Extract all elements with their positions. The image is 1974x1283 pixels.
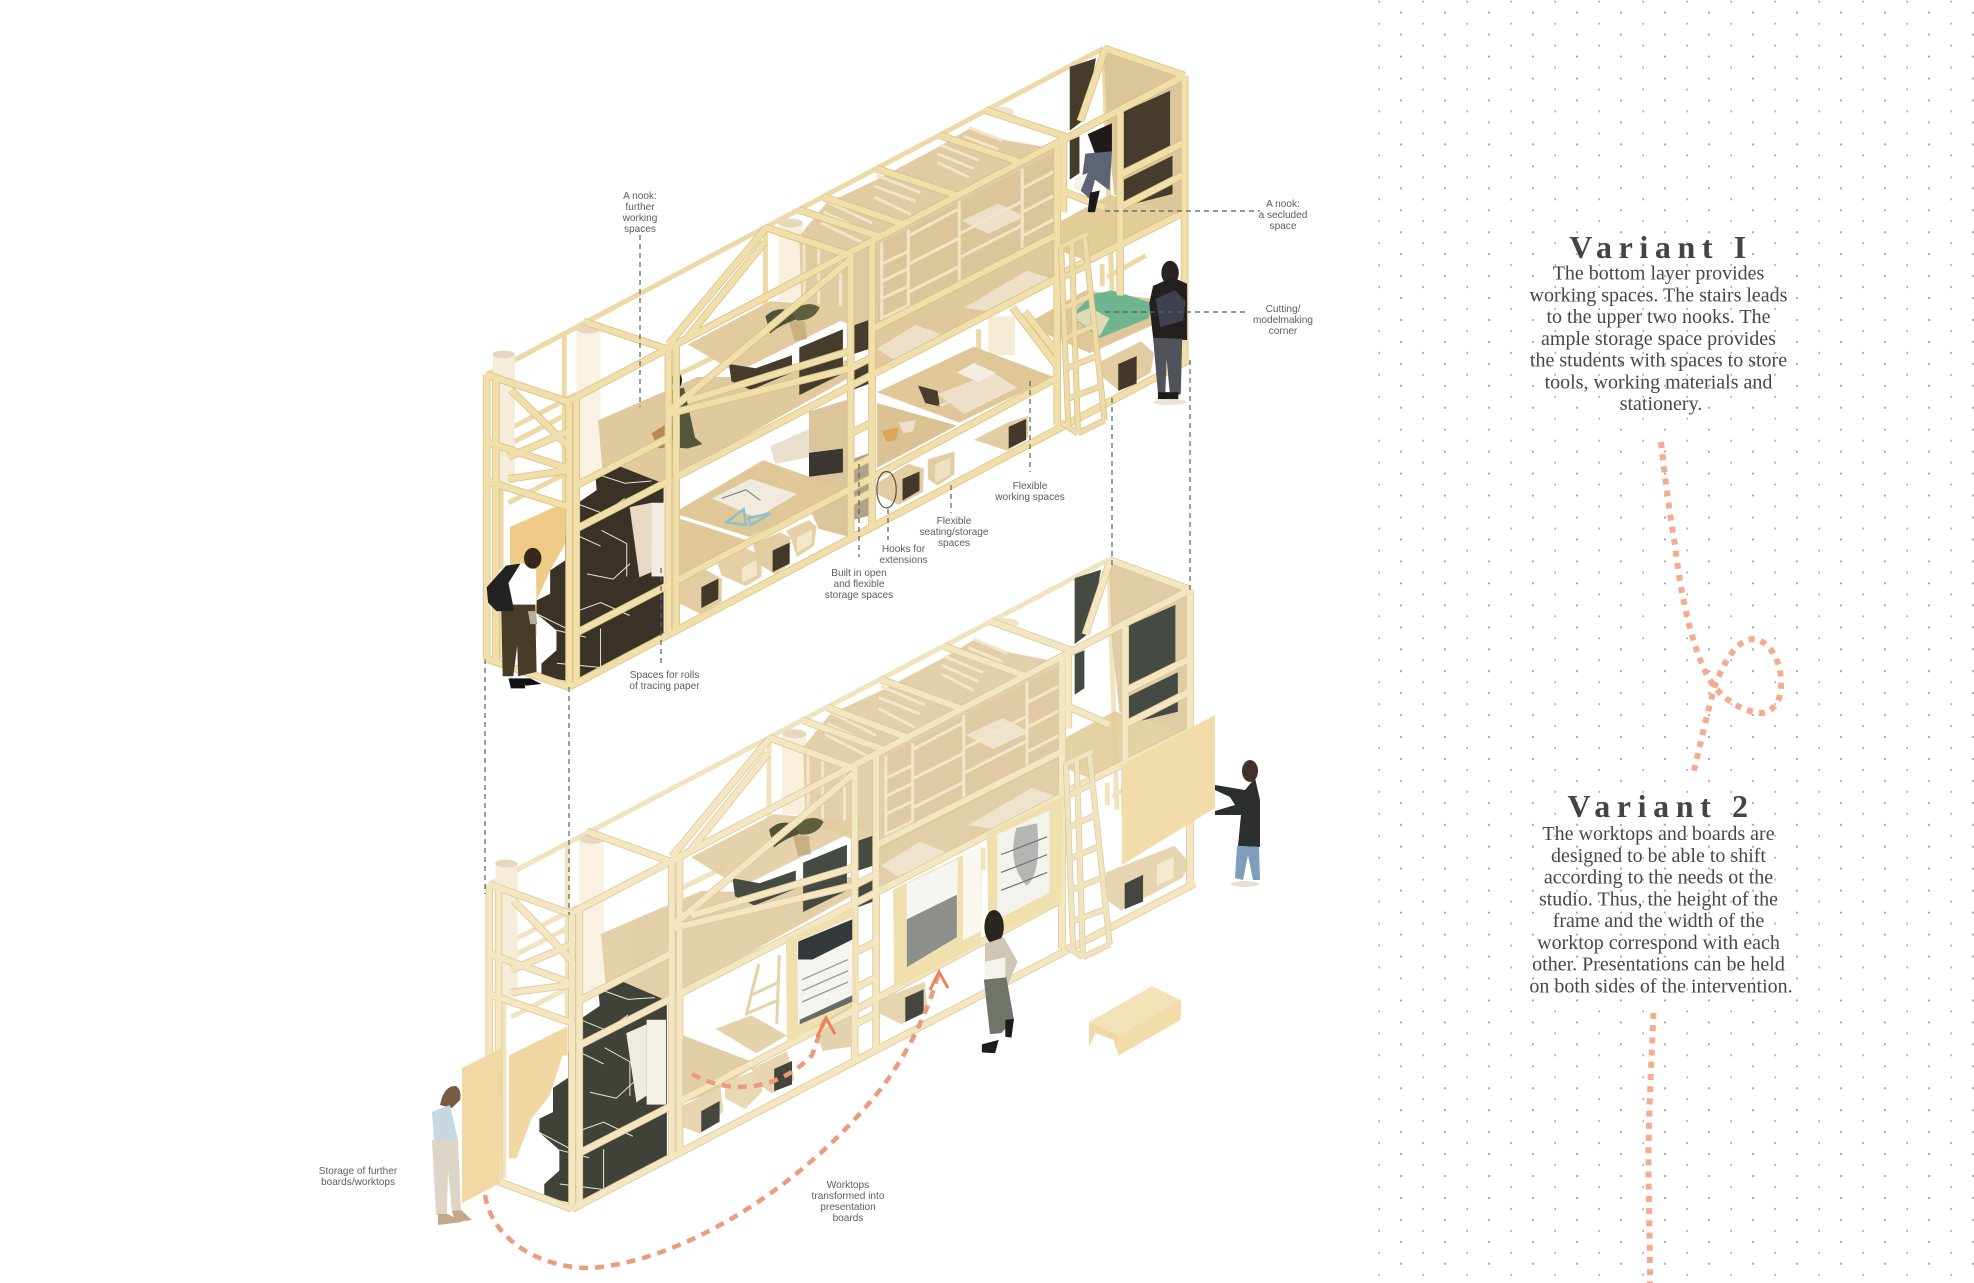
front frame [489, 547, 1195, 1222]
ladder [1061, 234, 1105, 433]
label: flexible working spaces: Flexible [1013, 481, 1048, 492]
label: flexible seating: seating/storage [919, 527, 989, 538]
isometric drawing: variant 2 module [489, 547, 1195, 1222]
back frame [487, 48, 1146, 659]
worktop movement path [485, 972, 948, 1268]
paper rolls [495, 607, 1019, 1008]
bench [1089, 986, 1181, 1056]
label: worktops transformed: transformed into [812, 1191, 885, 1202]
isometric drawing: variant 1 module [487, 48, 1189, 688]
person with backpack [487, 548, 541, 688]
label: nook working spaces: further [625, 202, 655, 213]
label: secluded nook: A nook: [1266, 199, 1300, 210]
text block: variant I: The bottom layer provides [1553, 262, 1765, 284]
storage stairs [537, 464, 664, 683]
label: worktops transformed: Worktops [827, 1180, 869, 1191]
label: tracing paper: of tracing paper [629, 681, 700, 692]
text block: variant I: working spaces. The stairs leads [1530, 284, 1788, 306]
label: hooks: extensions [879, 555, 928, 566]
dashed connector with loop [1661, 442, 1781, 771]
label: cutting corner: corner [1269, 326, 1298, 337]
label: secluded nook: space [1270, 221, 1297, 232]
hanging tracing paper [630, 503, 668, 577]
label: hooks: Hooks for [882, 544, 926, 555]
text block: variant I: to the upper two nooks. The [1546, 306, 1771, 328]
yellow end wall [510, 501, 569, 646]
woman holding right board [1215, 760, 1260, 887]
presentation board 3 [987, 797, 1063, 939]
label: built in storage: Built in open [831, 568, 887, 579]
leader lines [485, 211, 1260, 915]
upper slabs [601, 549, 1190, 1036]
text block: variant 2: studio. Thus, the height of the [1539, 888, 1778, 910]
person at green table [1149, 261, 1187, 405]
heading: variant I: Variant I [1569, 229, 1753, 265]
text block: variant 2: on both sides of the intervention. [1529, 975, 1793, 997]
label: secluded nook: a secluded [1259, 210, 1307, 221]
label: tracing paper: Spaces for rolls [630, 670, 699, 681]
labels [319, 191, 1313, 1224]
dashed connector down [1648, 1013, 1654, 1283]
upper slabs [598, 48, 1185, 507]
yellow end wall [509, 1026, 568, 1158]
front frame [487, 48, 1189, 687]
presentation board 2 [893, 846, 982, 989]
storage boxes and tracing paper [626, 846, 1190, 1134]
seated person [651, 373, 702, 449]
text block: variant I: tools, working materials and [1545, 371, 1772, 393]
worktops [716, 1015, 787, 1053]
presentation board 1 [786, 908, 856, 1043]
label: flexible working spaces: working spaces [994, 492, 1065, 503]
label: nook working spaces: working [622, 213, 657, 224]
worktop with drawing [673, 460, 847, 586]
hooks [877, 472, 896, 508]
green cutting table [1025, 290, 1153, 353]
dark panels [729, 58, 1173, 395]
label: cutting corner: Cutting/ [1266, 304, 1301, 315]
label: worktops transformed: boards [833, 1213, 863, 1224]
text block: variant 2: according to the needs ot the [1544, 866, 1773, 888]
standing presenter [982, 910, 1018, 1053]
worktop with laptop [877, 347, 1054, 468]
label: storage of boards: boards/worktops [321, 1177, 395, 1188]
small ladder [746, 955, 779, 1024]
label: flexible seating: spaces [938, 538, 970, 549]
right board [1122, 715, 1215, 865]
left board [462, 1048, 502, 1203]
label: storage of boards: Storage of further [319, 1166, 398, 1177]
plant [765, 304, 820, 341]
shelving wall [799, 128, 1059, 334]
climbing person [1073, 123, 1112, 212]
dotted background panel [1378, 0, 1974, 1283]
text block: variant I: stationery. [1620, 393, 1702, 415]
storage stairs [539, 977, 667, 1206]
dark panels [733, 562, 1178, 920]
heading: variant 2: Variant 2 [1567, 788, 1755, 824]
plant [769, 817, 824, 857]
back frame [489, 547, 1151, 1192]
lower level in close-up coordinates [509, 944, 851, 1158]
text block: variant 2: other. Presentations can be held [1532, 954, 1785, 976]
label: nook working spaces: A nook: [623, 191, 657, 202]
wall behind [807, 944, 851, 1051]
ladder [1066, 751, 1110, 958]
text block: variant I: ample storage space provides [1541, 328, 1776, 350]
label: cutting corner: modelmaking [1253, 315, 1313, 326]
text block: variant 2: worktop correspond with each [1537, 932, 1780, 954]
label: built in storage: storage spaces [825, 590, 893, 601]
woman holding board [432, 1086, 472, 1225]
text block: variant 2: frame and the width of the [1553, 910, 1764, 932]
text block: variant 2: The worktops and boards are [1542, 823, 1775, 845]
label: nook working spaces: spaces [624, 224, 656, 235]
text block: variant I: the students with spaces to store [1530, 350, 1787, 372]
label: worktops transformed: presentation [820, 1202, 876, 1213]
text block: variant 2: designed to be able to shift [1551, 845, 1766, 867]
paper rolls [492, 107, 1014, 483]
shelving wall [803, 635, 1063, 854]
storage boxes [673, 341, 1154, 614]
label: built in storage: and flexible [833, 579, 885, 590]
label: flexible seating: Flexible [937, 516, 972, 527]
